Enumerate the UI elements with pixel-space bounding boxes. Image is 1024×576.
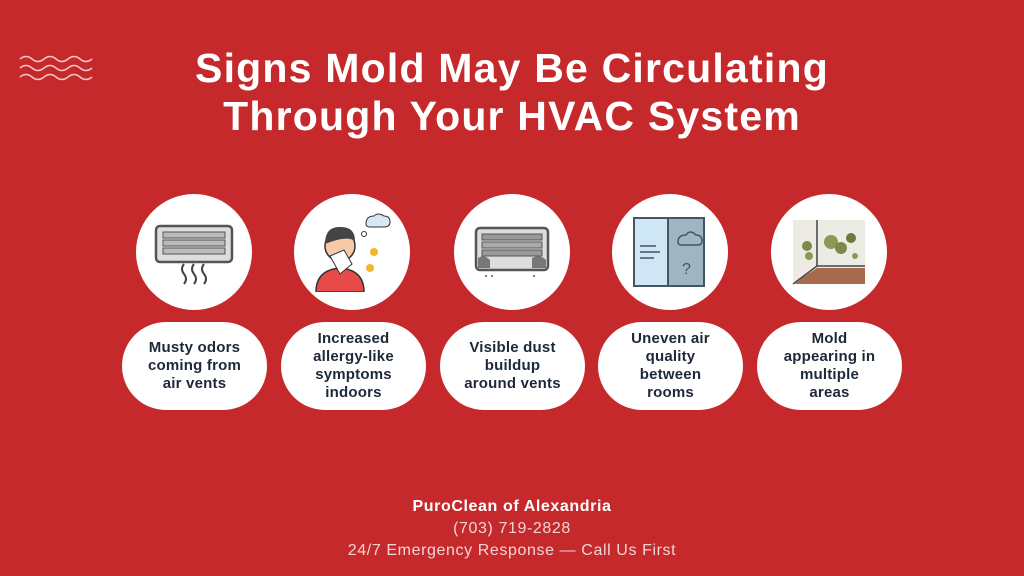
- text: uneven air quality: quality: [646, 348, 695, 365]
- icon: air vent with odor: [136, 194, 252, 310]
- text: uneven air quality: rooms: [647, 384, 694, 401]
- icon: uneven air window: [612, 194, 728, 310]
- footer: tagline: 24/7 Emergency Response — Call Us First: [348, 542, 676, 559]
- text: allergy symptoms: [281, 322, 426, 410]
- text: visible dust: around vents: [464, 375, 561, 392]
- icon: mold in corner: [771, 194, 887, 310]
- title: [195, 45, 829, 139]
- title: Through Your HVAC System: [223, 93, 801, 139]
- text: allergy symptoms: symptoms: [315, 366, 392, 383]
- text: musty odors: coming from: [148, 357, 241, 374]
- text: mold in multiple areas: areas: [809, 384, 850, 401]
- icon: sneezing person: [294, 194, 410, 310]
- icon: dusty vent: [454, 194, 570, 310]
- icon: uneven air window: ?: [682, 261, 691, 278]
- footer: company name: PuroClean of Alexandria: [412, 498, 612, 515]
- text: mold in multiple areas: multiple: [800, 366, 859, 383]
- footer: phone: (703) 719-2828: [453, 520, 571, 537]
- text: allergy symptoms: Increased: [318, 330, 389, 347]
- text: uneven air quality: Uneven air: [631, 330, 710, 347]
- text: visible dust: [440, 322, 585, 410]
- text: mold in multiple areas: Mold: [812, 330, 847, 347]
- text: allergy symptoms: allergy-like: [313, 348, 394, 365]
- text: musty odors: [122, 322, 267, 410]
- text: musty odors: Musty odors: [149, 339, 240, 356]
- text: mold in multiple areas: [757, 322, 902, 410]
- text: visible dust: buildup: [485, 357, 540, 374]
- text: uneven air quality: between: [640, 366, 701, 383]
- text: allergy symptoms: indoors: [325, 384, 382, 401]
- text: mold in multiple areas: appearing in: [784, 348, 875, 365]
- decorative waves icon: [20, 56, 92, 80]
- text: visible dust: Visible dust: [469, 339, 556, 356]
- title: Signs Mold May Be Circulating: [195, 45, 829, 91]
- text: uneven air quality: [598, 322, 743, 410]
- text: musty odors: air vents: [163, 375, 226, 392]
